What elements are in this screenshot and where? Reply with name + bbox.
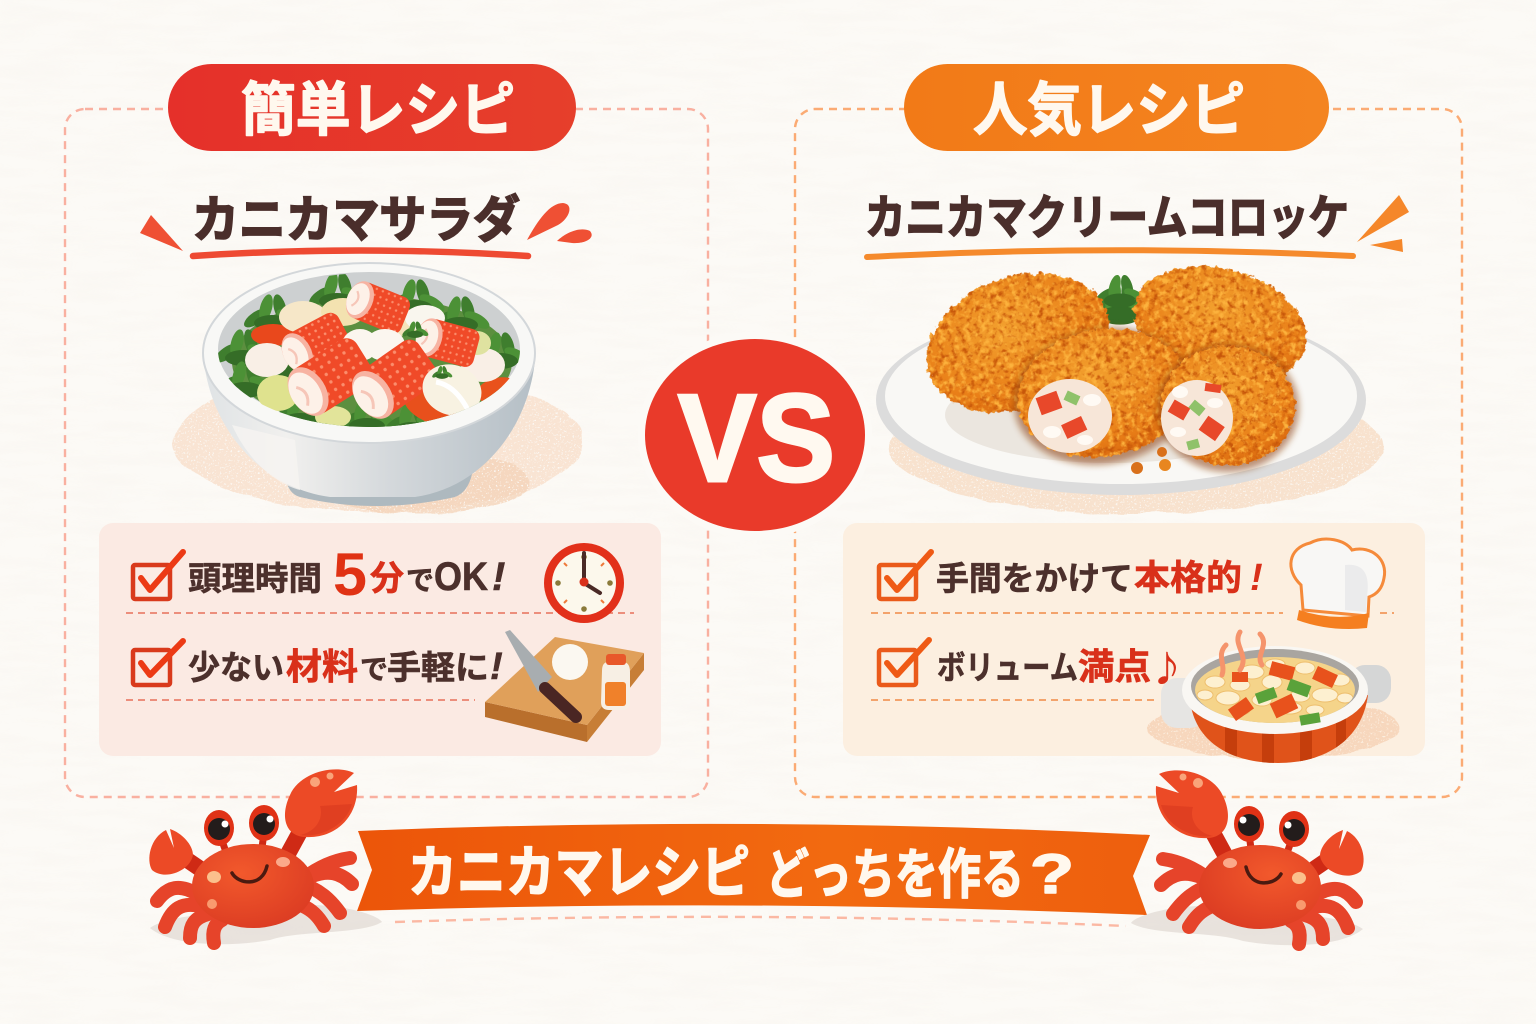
point: few ingredients bbox=[126, 638, 503, 700]
croquette filling bbox=[1028, 379, 1233, 456]
point: 5 minute cook time bbox=[126, 541, 634, 613]
panel header: easy recipe bbox=[168, 63, 576, 151]
point: few ingredients: 手軽に bbox=[387, 641, 489, 689]
panel: easy recipe bbox=[65, 63, 708, 797]
bottom question banner: どっちを作る bbox=[766, 830, 1024, 909]
point: 5 minute cook time: ! bbox=[492, 555, 505, 599]
dish title: kanikama salad: カニカマサラダ bbox=[192, 180, 520, 252]
point: authentic effort: 本格的 bbox=[1134, 550, 1242, 601]
icon: cutting board with knife, egg and bottle bbox=[485, 630, 644, 742]
crab mascot: left bbox=[149, 769, 382, 944]
crab mascot: right bbox=[1131, 770, 1364, 945]
point: satisfying volume: ♪ bbox=[1150, 642, 1184, 691]
point: few ingredients: ! bbox=[490, 646, 503, 688]
point: few ingredients: 材料 bbox=[286, 638, 358, 690]
point: authentic effort: 手間をかけて bbox=[936, 552, 1133, 600]
point: 5 minute cook time: 頭理時間 bbox=[188, 552, 322, 600]
panel header: easy recipe: 簡単レシピ bbox=[241, 63, 515, 147]
VS badge bbox=[638, 332, 872, 538]
panel header: popular recipe bbox=[904, 63, 1329, 151]
illustration: salad bowl bbox=[173, 263, 583, 514]
point: 5 minute cook time: で bbox=[406, 559, 434, 599]
bottom question banner: ? bbox=[1030, 842, 1074, 905]
parsley bbox=[1084, 274, 1157, 325]
point: authentic effort bbox=[871, 550, 1394, 613]
icon: chef hat bbox=[1291, 539, 1385, 629]
point: satisfying volume: ボリューム bbox=[937, 641, 1078, 689]
point: satisfying volume bbox=[871, 638, 1184, 700]
icon: clock bbox=[544, 543, 624, 623]
panel: easy recipe points bbox=[99, 523, 661, 756]
point: few ingredients: 少ない bbox=[188, 641, 284, 689]
panel header: popular recipe: 人気レシピ bbox=[973, 63, 1245, 147]
point: authentic effort: ! bbox=[1250, 557, 1263, 599]
panel: popular recipe bbox=[795, 63, 1462, 797]
VS badge: VS bbox=[678, 370, 835, 508]
point: few ingredients: で bbox=[360, 648, 388, 688]
point: 5 minute cook time: 分 bbox=[370, 551, 404, 600]
point: satisfying volume: 満点 bbox=[1078, 638, 1151, 690]
bottom question banner: カニカマレシピ bbox=[408, 828, 750, 909]
point: 5 minute cook time: OK bbox=[434, 555, 488, 599]
icon: gratin casserole bbox=[1148, 632, 1400, 765]
panel: popular recipe points bbox=[843, 523, 1425, 765]
bottom question banner bbox=[357, 824, 1150, 926]
dish title: kanikama cream croquette: カニカマクリームコロッケ bbox=[865, 179, 1349, 248]
point: 5 minute cook time: 5 bbox=[333, 541, 367, 608]
illustration: croquettes on a plate bbox=[876, 248, 1384, 514]
